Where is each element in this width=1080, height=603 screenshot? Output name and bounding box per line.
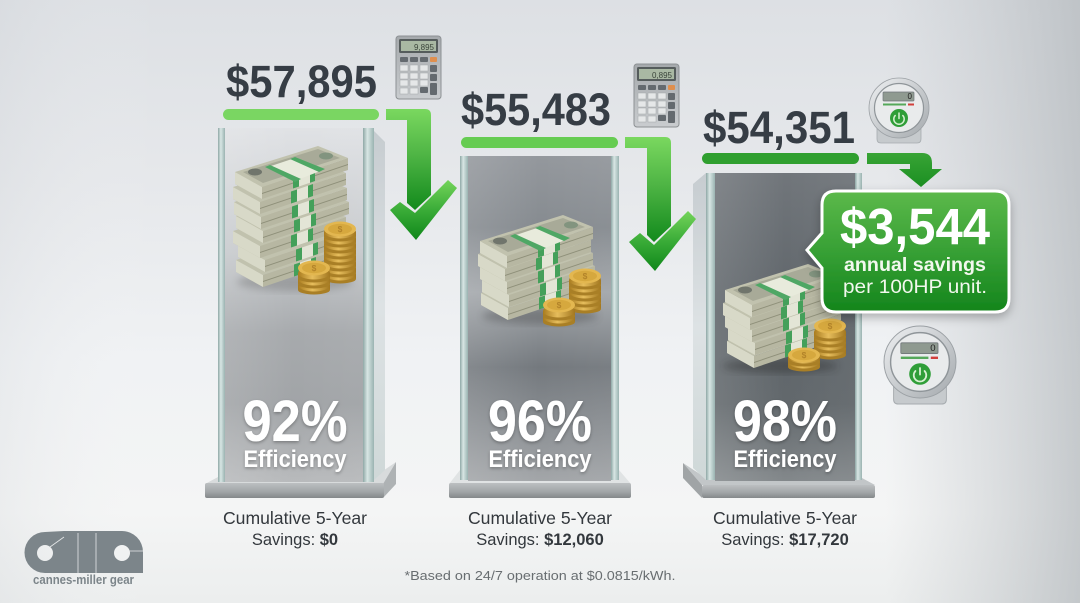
calculator 2 xyxy=(634,64,679,127)
caption 1 xyxy=(223,508,367,549)
pillar 3 coins xyxy=(788,318,846,372)
pillar 2 efficiency: Efficiency xyxy=(488,446,592,473)
pillar 3 base xyxy=(683,463,875,498)
pillar 1 base xyxy=(205,462,396,498)
pillar 3 efficiency: Efficiency xyxy=(734,446,837,473)
pillar 3 efficiency: 98% xyxy=(733,389,837,454)
pillar 1 efficiency: 92% xyxy=(242,389,348,454)
pillar 1 xyxy=(205,128,396,498)
callout amount: $3,544 xyxy=(840,198,991,255)
pillar 2 base xyxy=(449,470,631,498)
check 1 xyxy=(390,180,457,240)
pillar 3 money stack xyxy=(722,264,846,373)
callout text: annual savings xyxy=(844,255,986,276)
meter 2: 0 xyxy=(930,343,936,354)
pillar 3 xyxy=(683,173,875,498)
meter 1: 0 xyxy=(908,92,913,101)
pillar 2 coins xyxy=(543,268,601,326)
arrow 2 xyxy=(625,137,696,271)
footnote: *Based on 24/7 operation at $0.0815/kWh. xyxy=(404,568,676,583)
logo wordmark: cannes-miller gear xyxy=(33,573,134,587)
cost 2: $55,483 xyxy=(461,84,611,135)
calculator 1 xyxy=(396,36,441,99)
pillar 2 metal panel xyxy=(468,156,611,481)
pillar 1 efficiency: Efficiency xyxy=(244,446,347,473)
arrow 1 xyxy=(386,109,457,240)
pillar 1 money stack xyxy=(233,146,356,294)
callout xyxy=(807,191,1009,312)
caption 1: Cumulative 5-Year xyxy=(223,508,367,528)
caption 2: Cumulative 5-Year xyxy=(468,508,612,528)
logo xyxy=(24,531,143,587)
logo mark xyxy=(24,531,143,573)
pillar 1 coins xyxy=(298,222,356,294)
caption 2: Savings: $12,060 xyxy=(476,531,604,549)
meter 1 xyxy=(869,78,929,143)
caption 1: Savings: $0 xyxy=(252,531,338,549)
arrow 3 xyxy=(867,153,942,187)
caption 3: Cumulative 5-Year xyxy=(713,508,857,528)
callout: per 100HP unit. xyxy=(843,277,987,298)
meter 2 xyxy=(884,326,956,404)
bar 3 xyxy=(702,153,859,164)
caption 3: Savings: $17,720 xyxy=(721,531,849,549)
check 2 xyxy=(629,211,696,271)
cost 3: $54,351 xyxy=(703,102,855,153)
pillar 2 money stack xyxy=(478,215,601,326)
cost 1: $57,895 xyxy=(226,56,377,107)
bar 2 xyxy=(461,137,618,148)
caption 3 xyxy=(713,508,857,549)
calculator 2: 0,895 xyxy=(652,71,673,80)
pillar 3 metal panel xyxy=(715,173,855,481)
calculator 1: 9,895 xyxy=(414,43,435,52)
bar 1 xyxy=(223,109,379,120)
pillar 1 metal panel xyxy=(225,128,363,482)
pillar 2 efficiency: 96% xyxy=(488,389,592,454)
caption 2 xyxy=(468,508,612,549)
pillar 2 xyxy=(449,156,631,498)
